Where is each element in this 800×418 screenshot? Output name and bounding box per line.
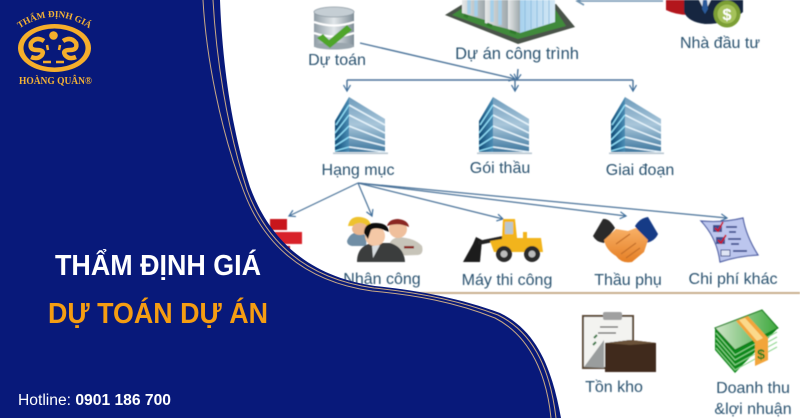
icon: bricks	[270, 219, 302, 256]
label: Dự án công trình: Dự án công trình	[455, 45, 579, 63]
title: Thẩm định giá: THẨM ĐỊNH GIÁ	[55, 248, 261, 282]
arrow: investor to project	[577, 0, 663, 5]
label: Dự toán: Dự toán	[308, 52, 366, 69]
logo text top: THẨM ĐỊNH GIÁ	[16, 11, 92, 28]
label: Doanh thu & lợi nhuận	[714, 380, 792, 418]
label: Chi phí khác: Chi phí khác	[689, 271, 777, 288]
icon: stack of money	[715, 310, 778, 373]
icon: project buildings	[445, 0, 575, 44]
logo: Hoàng Quân	[16, 11, 92, 87]
icon: investor group: $	[723, 7, 732, 24]
title: Dự toán dự án: DỰ TOÁN DỰ ÁN	[48, 296, 268, 330]
logo text bottom: HOÀNG QUÂN®	[19, 75, 92, 87]
label: Thầu phụ: Thầu phụ	[594, 272, 662, 289]
label: Nhà đầu tư: Nhà đầu tư	[680, 35, 760, 52]
icon: building Giai đoạn	[609, 97, 664, 154]
icon: checklist	[701, 218, 758, 262]
icon: investor group	[666, 0, 743, 28]
label: Doanh thu & lợi nhuận: Doanh thu	[716, 380, 790, 397]
icon: building Hạng mục	[333, 97, 388, 154]
label: Máy thi công: Máy thi công	[462, 272, 552, 289]
arrows: to cost items	[289, 183, 727, 219]
icon: stack of money: $	[757, 346, 765, 362]
icon: workers	[347, 217, 422, 262]
divider line	[380, 292, 800, 294]
panel: project cost diagram	[270, 0, 800, 418]
label: Tồn kho: Tồn kho	[585, 379, 643, 396]
label: Hạng mục: Hạng mục	[322, 162, 394, 179]
label: Gói thầu: Gói thầu	[470, 160, 530, 177]
label: Doanh thu & lợi nhuận: &lợi nhuận	[714, 401, 792, 418]
hotline: Hotline: 0901 186 700	[18, 392, 171, 409]
label: Nhân công: Nhân công	[343, 271, 421, 288]
icon: building Gói thầu	[477, 97, 532, 154]
panel: navy curved background	[0, 0, 561, 418]
arrows: to work breakdown	[347, 43, 633, 91]
icon: loader	[463, 219, 543, 262]
label: Giai đoạn: Giai đoạn	[606, 162, 674, 179]
icon: database with check	[314, 7, 354, 50]
icon: inventory clipboard and box	[583, 312, 656, 372]
icon: handshake	[593, 217, 658, 262]
logo emblem	[18, 24, 91, 72]
